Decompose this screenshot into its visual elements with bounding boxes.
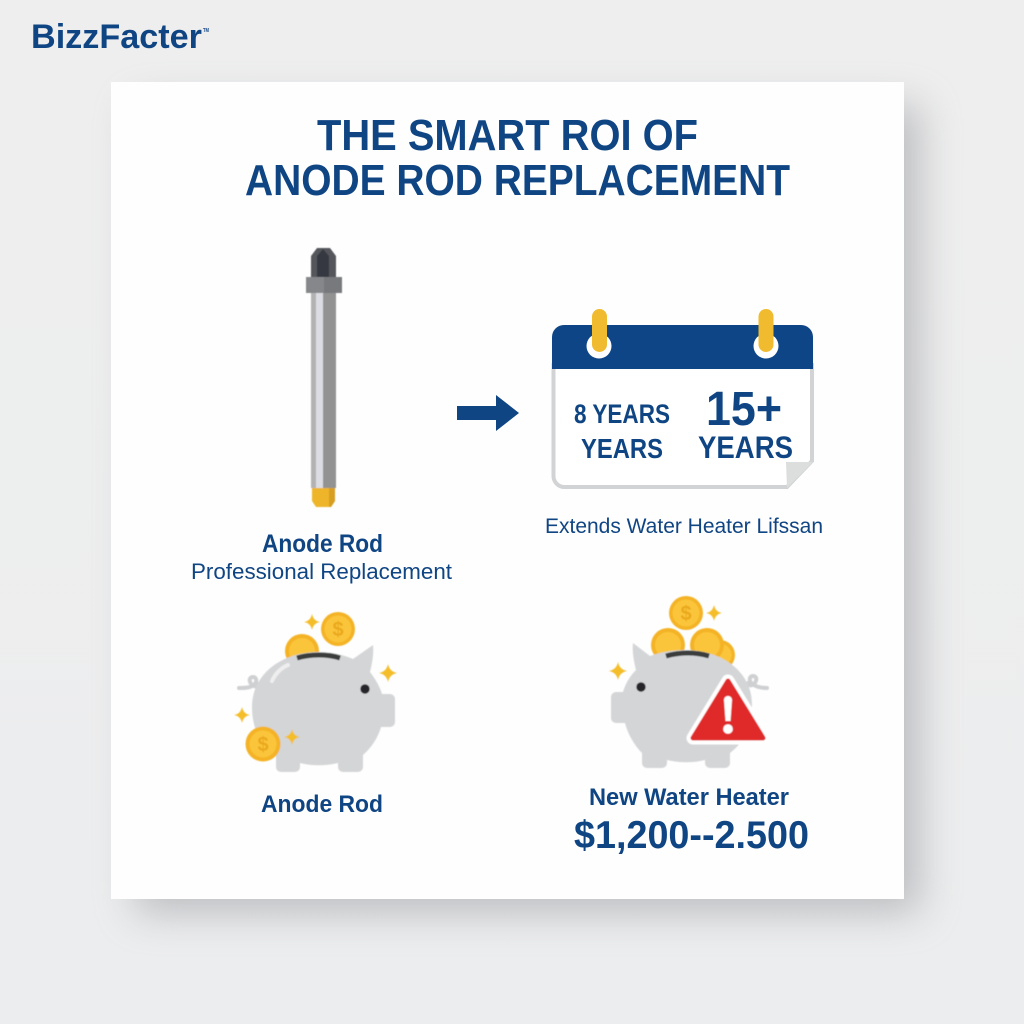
icon: piggy bank with warning [609, 596, 767, 768]
coin top: $ [332, 619, 344, 641]
caption: anode rod replacement: Professional Replacement [191, 559, 452, 584]
caption: new water heater cost: $1,200--2.500 [574, 814, 809, 857]
pig body [252, 645, 395, 772]
calendar text: after: YEARS [698, 429, 793, 465]
calendar text: after [698, 383, 793, 465]
calendar page [554, 365, 812, 487]
caption: new water heater cost: New Water Heater [589, 784, 789, 811]
pig eye [636, 682, 646, 692]
pig eye [360, 684, 370, 694]
coins behind [651, 628, 735, 670]
calendar ring right [754, 309, 778, 358]
pig tail [748, 676, 767, 688]
coin behind [285, 634, 319, 668]
coin bottom: $ [257, 734, 269, 756]
icon: piggy bank with coins [234, 612, 397, 772]
logo: BizzFacter: BizzFacter [31, 18, 202, 56]
icon: anode rod [306, 248, 342, 507]
panel: white card [111, 82, 920, 913]
calendar text: before [574, 399, 670, 464]
logo: BizzFacter: TM [203, 28, 209, 34]
sparkles [609, 605, 722, 680]
title: ANODE ROD REPLACEMENT [245, 157, 790, 205]
pig slot [297, 655, 340, 658]
caption: anode rod replacement [191, 530, 452, 584]
calendar text: before: 8 YEARS [574, 399, 670, 429]
pig slot [666, 653, 709, 656]
caption: extends lifespan: Extends Water Heater Lifssan [545, 515, 823, 538]
arrow [457, 395, 519, 431]
caption: anode rod replacement: Anode Rod [262, 530, 383, 558]
calendar text: after: 15+ [706, 383, 782, 436]
icon: calendar [552, 309, 813, 488]
calendar ring left [586, 309, 612, 358]
coin top: $ [680, 603, 692, 625]
title [245, 112, 790, 205]
calendar text: before: YEARS [581, 433, 663, 464]
caption: new water heater cost [574, 784, 809, 857]
coin bottom [246, 726, 280, 762]
caption: anode rod cost: Anode Rod [261, 791, 383, 818]
sparkles [234, 614, 397, 745]
pig tail [239, 677, 258, 688]
pig body [611, 643, 752, 768]
coin top [321, 612, 355, 646]
calendar page fold [786, 462, 813, 488]
calendar header [552, 325, 813, 369]
title: THE SMART ROI OF [317, 112, 698, 160]
pig highlight [272, 665, 288, 681]
warning triangle [693, 681, 763, 738]
coin top [669, 596, 703, 630]
